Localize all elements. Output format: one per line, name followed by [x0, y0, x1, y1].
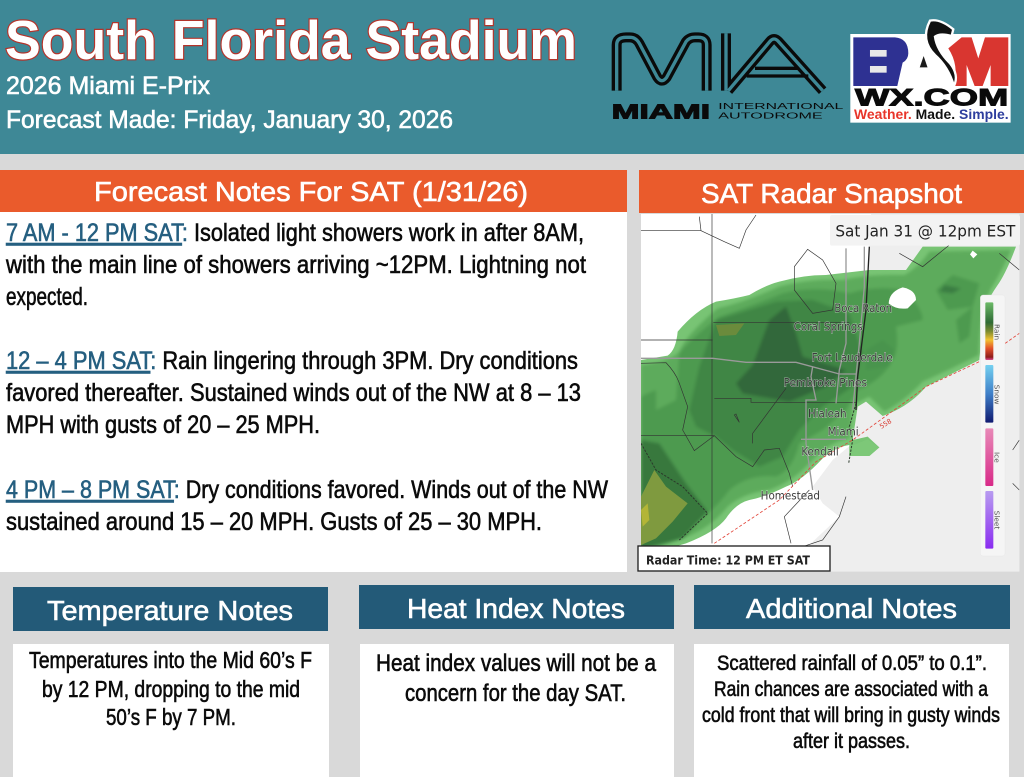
text block: 12 to 4 PM: favored thereafter. Sustained winds out of the NW at 8 – 13 [6, 379, 581, 407]
subtitle: event: 2026 Miami E-Prix [6, 72, 210, 100]
text: heat index: Heat index values will not be a [376, 650, 657, 677]
red flight track [714, 333, 1019, 543]
text block: 4 to 8 PM: sustained around 15 – 20 MPH. Gusts of 25 – 30 MPH. [6, 508, 542, 536]
city labels [761, 301, 893, 503]
logo: Miami International Autodrome: INTERNATIONAL [718, 101, 844, 111]
text: heat index [376, 650, 657, 707]
heading: forecast notes [0, 170, 627, 212]
title: South Florida Stadium [5, 9, 577, 71]
logo: BAM WX.COM: WX.COM [855, 85, 1008, 112]
text block: 12 to 4 PM [6, 347, 581, 439]
heading: radar snapshot: SAT Radar Snapshot [701, 178, 962, 209]
text: temperature: 50’s F by 7 PM. [106, 704, 236, 730]
text block: 7 AM to 12 PM: 7 AM - 12 PM SAT: Isolated light showers work in after 8AM, [6, 219, 584, 247]
text: additional: Scattered rainfall of 0.05” to 0.1”. [717, 652, 987, 675]
heading: heat index notes [359, 585, 674, 629]
text: additional: after it passes. [793, 730, 910, 753]
header band [0, 0, 1024, 154]
text: temperature [29, 647, 312, 730]
timestamp tag [830, 215, 1020, 246]
heading: temperature notes: Temperature Notes [47, 595, 293, 626]
logo: BAM WX.COM: Weather. Made. Simple. [854, 106, 1009, 122]
logo: Miami International Autodrome [612, 33, 844, 123]
radar time label [638, 546, 830, 571]
text: heat index: concern for the day SAT. [405, 680, 626, 707]
text: additional [702, 652, 1000, 753]
city labels: Coral Springs [794, 320, 863, 334]
text block: 4 to 8 PM [6, 476, 608, 536]
radar legend [980, 295, 1005, 556]
panel: heat index notes [359, 585, 674, 777]
text block: 7 AM to 12 PM: with the main line of showers arriving ~12PM. Lightning not [5, 251, 586, 279]
logo: Miami International Autodrome: MIAMI [612, 100, 710, 123]
text block: 12 to 4 PM: MPH with gusts of 20 – 25 MPH. [6, 411, 320, 439]
radar map [638, 214, 1020, 572]
logo: Miami International Autodrome: AUTODROME [718, 110, 823, 120]
city labels: Miami [828, 424, 859, 438]
heading: radar snapshot [639, 170, 1024, 213]
heading: forecast notes: Forecast Notes For SAT (1/31/26) [94, 176, 528, 207]
radar legend: Snow [993, 385, 1002, 404]
city labels: Boca Raton [834, 301, 892, 315]
panel: temperature notes [13, 587, 329, 777]
text block: 7 AM to 12 PM [5, 219, 586, 311]
radar legend: Sleet [993, 511, 1002, 529]
rain field [641, 247, 1016, 557]
radar legend: Ice [993, 452, 1002, 463]
city labels: Fort Lauderdale [812, 351, 893, 365]
text block: 7 AM to 12 PM: expected. [6, 283, 88, 311]
city labels: Kendall [801, 445, 839, 459]
text: temperature: Temperatures into the Mid 60’s F [29, 647, 312, 673]
heading: additional notes: Additional Notes [746, 593, 957, 624]
timestamp tag: Sat Jan 31 @ 12pm EST [835, 222, 1016, 241]
text block: 12 to 4 PM: 12 – 4 PM SAT: Rain lingering through 3PM. Dry conditions [6, 347, 578, 375]
map base [641, 214, 1019, 572]
radar legend: Rain [993, 324, 1002, 340]
subtitle: forecast date: Forecast Made: Friday, January 30, 2026 [6, 106, 453, 134]
county and road lines [641, 214, 1019, 547]
city labels: Pembroke Pines [784, 376, 867, 390]
panel: additional notes [694, 585, 1010, 777]
radar time label: Radar Time: 12 PM ET SAT [646, 553, 811, 567]
city labels: Hialeah [808, 407, 847, 421]
text block: 4 to 8 PM: 4 PM – 8 PM SAT: Dry conditions favored. Winds out of the NW [6, 476, 608, 504]
text: temperature: by 12 PM, dropping to the mid [42, 676, 300, 702]
heading: heat index notes: Heat Index Notes [407, 593, 625, 624]
heading: temperature notes [13, 587, 328, 631]
heading: additional notes [694, 585, 1010, 629]
logo: BAM WX.COM [850, 20, 1011, 123]
radar map: 558 [878, 417, 893, 431]
city labels: Homestead [761, 489, 820, 503]
panel: forecast notes [0, 170, 627, 572]
